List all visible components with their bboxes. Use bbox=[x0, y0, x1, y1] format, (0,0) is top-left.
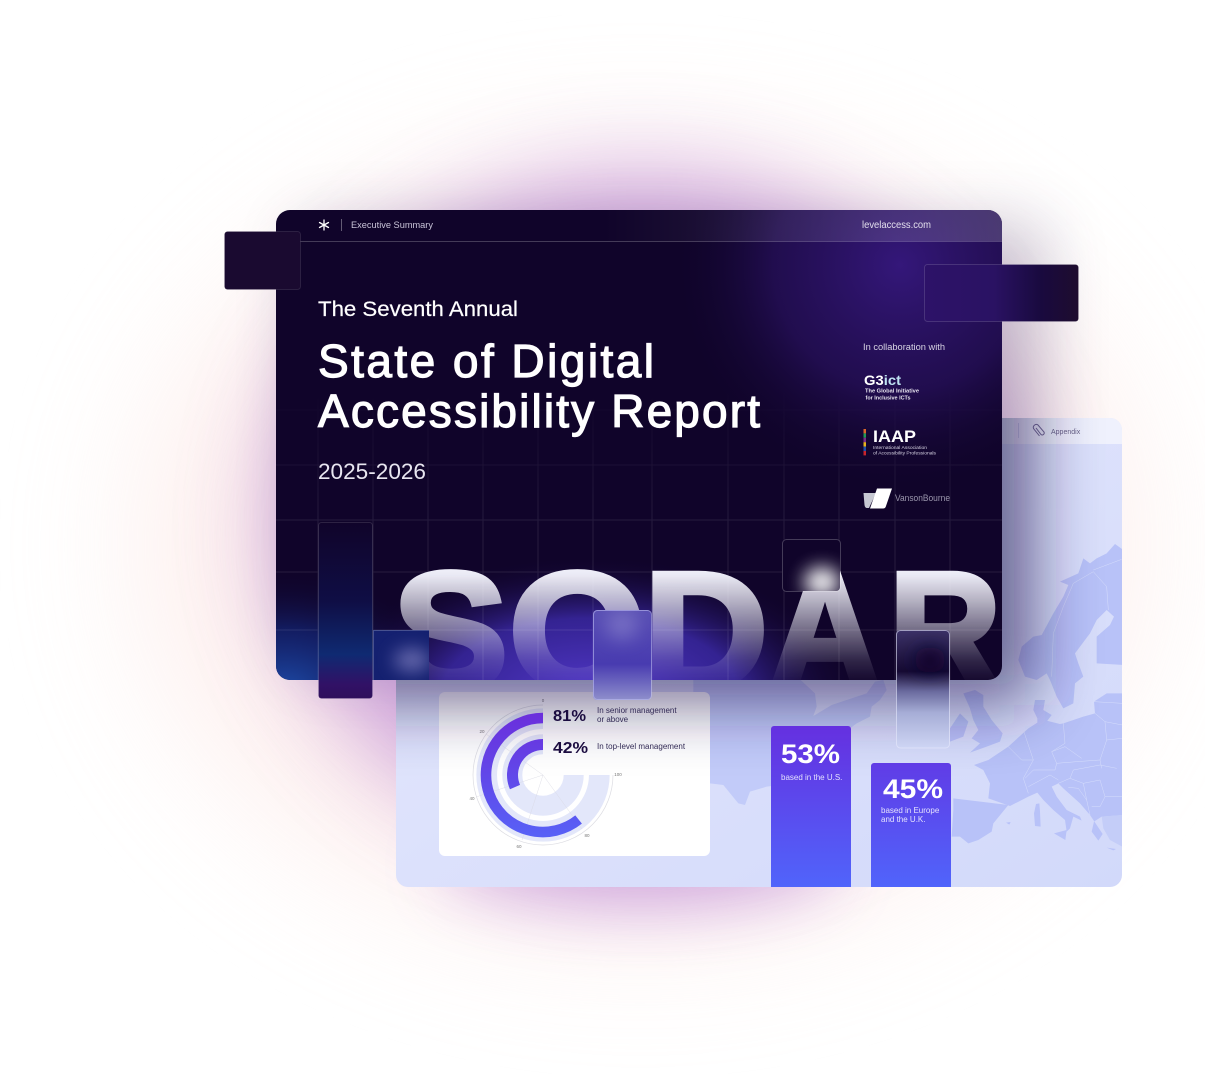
SODAR wordmark: D bbox=[644, 539, 768, 724]
glass tile: left tall bbox=[318, 522, 372, 698]
bar: 45 percent Europe bbox=[871, 763, 951, 887]
chart tracks bbox=[473, 705, 613, 845]
infographic canvas bbox=[141, 104, 1139, 962]
glass tile: over letter R bbox=[896, 630, 950, 748]
chart scale labels bbox=[469, 698, 622, 849]
logo: G3ict bbox=[864, 372, 919, 402]
chart scale labels: 0 bbox=[542, 698, 545, 703]
logo: VansonBourne: VansonBourne bbox=[895, 493, 950, 504]
title: State of Digital bbox=[318, 335, 654, 387]
chart: radial progress arcs bbox=[486, 718, 579, 832]
glass tile: over letter A bbox=[782, 539, 840, 597]
chart statistics: In senior management bbox=[597, 706, 677, 715]
map: north america and europe bbox=[693, 544, 1123, 850]
SODAR wordmark: O bbox=[509, 539, 646, 724]
SODAR wordmark: S bbox=[393, 539, 508, 724]
chart scale labels: 100 bbox=[614, 772, 622, 777]
soft outer card shadow bbox=[300, 225, 1045, 665]
chart statistics: 42% bbox=[553, 740, 588, 757]
logo: IAAP: of Accessibility Professionals bbox=[873, 450, 937, 456]
date range: 2025-2026 bbox=[318, 459, 426, 484]
collaboration heading: In collaboration with bbox=[863, 342, 945, 352]
nav label: website: levelaccess.com bbox=[862, 220, 931, 231]
bar: 53 percent U.S.: 53% bbox=[781, 739, 840, 769]
glass tile: center bbox=[593, 610, 652, 700]
icon: asterisk logo bbox=[320, 220, 328, 230]
logo: G3ict: for Inclusive ICTs bbox=[866, 396, 910, 402]
panel header with appendix label bbox=[396, 418, 1122, 444]
glass tile: top left bbox=[224, 232, 300, 290]
panel: chart card bbox=[439, 692, 710, 856]
bar: 45 percent Europe: 45% bbox=[883, 774, 943, 804]
SODAR wordmark: A bbox=[769, 539, 881, 724]
panel header with appendix label: Appendix bbox=[1051, 429, 1081, 436]
SODAR wordmark: R bbox=[889, 539, 1001, 724]
bar: 45 percent Europe: based in Europe bbox=[881, 806, 940, 815]
panel: main report card bbox=[276, 210, 1002, 724]
logo: G3ict: The Global Initiative bbox=[865, 388, 919, 394]
subtitle: The Seventh Annual bbox=[318, 298, 518, 321]
title: Accessibility Report bbox=[318, 385, 760, 437]
chart scale labels: 80 bbox=[584, 833, 590, 838]
bar: 45 percent Europe: and the U.K. bbox=[881, 815, 925, 824]
chart statistics: In top-level management bbox=[597, 742, 686, 751]
title bbox=[318, 335, 760, 437]
chart statistics: or above bbox=[597, 715, 629, 724]
background glow bbox=[140, 155, 1140, 935]
chart scale labels: 20 bbox=[479, 729, 485, 734]
logo: VansonBourne bbox=[864, 488, 950, 508]
top navigation bar bbox=[276, 210, 1002, 242]
bar: 53 percent U.S.: based in the U.S. bbox=[781, 773, 842, 782]
chart statistics: 81% bbox=[553, 708, 586, 725]
glass tile: blurred S bbox=[373, 630, 430, 680]
chart scale labels: 60 bbox=[516, 844, 522, 849]
chart statistics bbox=[553, 706, 686, 757]
main card shadow on panel bbox=[396, 418, 1083, 753]
bar: 53 percent U.S. bbox=[771, 726, 851, 887]
SODAR wordmark bbox=[400, 569, 996, 678]
logo: IAAP bbox=[864, 427, 937, 456]
panel: map background bbox=[396, 418, 1123, 887]
glass tile: top right bbox=[924, 264, 1078, 322]
chart scale labels: 40 bbox=[469, 796, 475, 801]
logo: IAAP: International Association bbox=[873, 445, 928, 450]
logo: IAAP: IAAP bbox=[873, 427, 916, 446]
logo: G3ict: G3ict bbox=[864, 372, 901, 388]
nav label: executive summary: Executive Summary bbox=[351, 220, 433, 231]
